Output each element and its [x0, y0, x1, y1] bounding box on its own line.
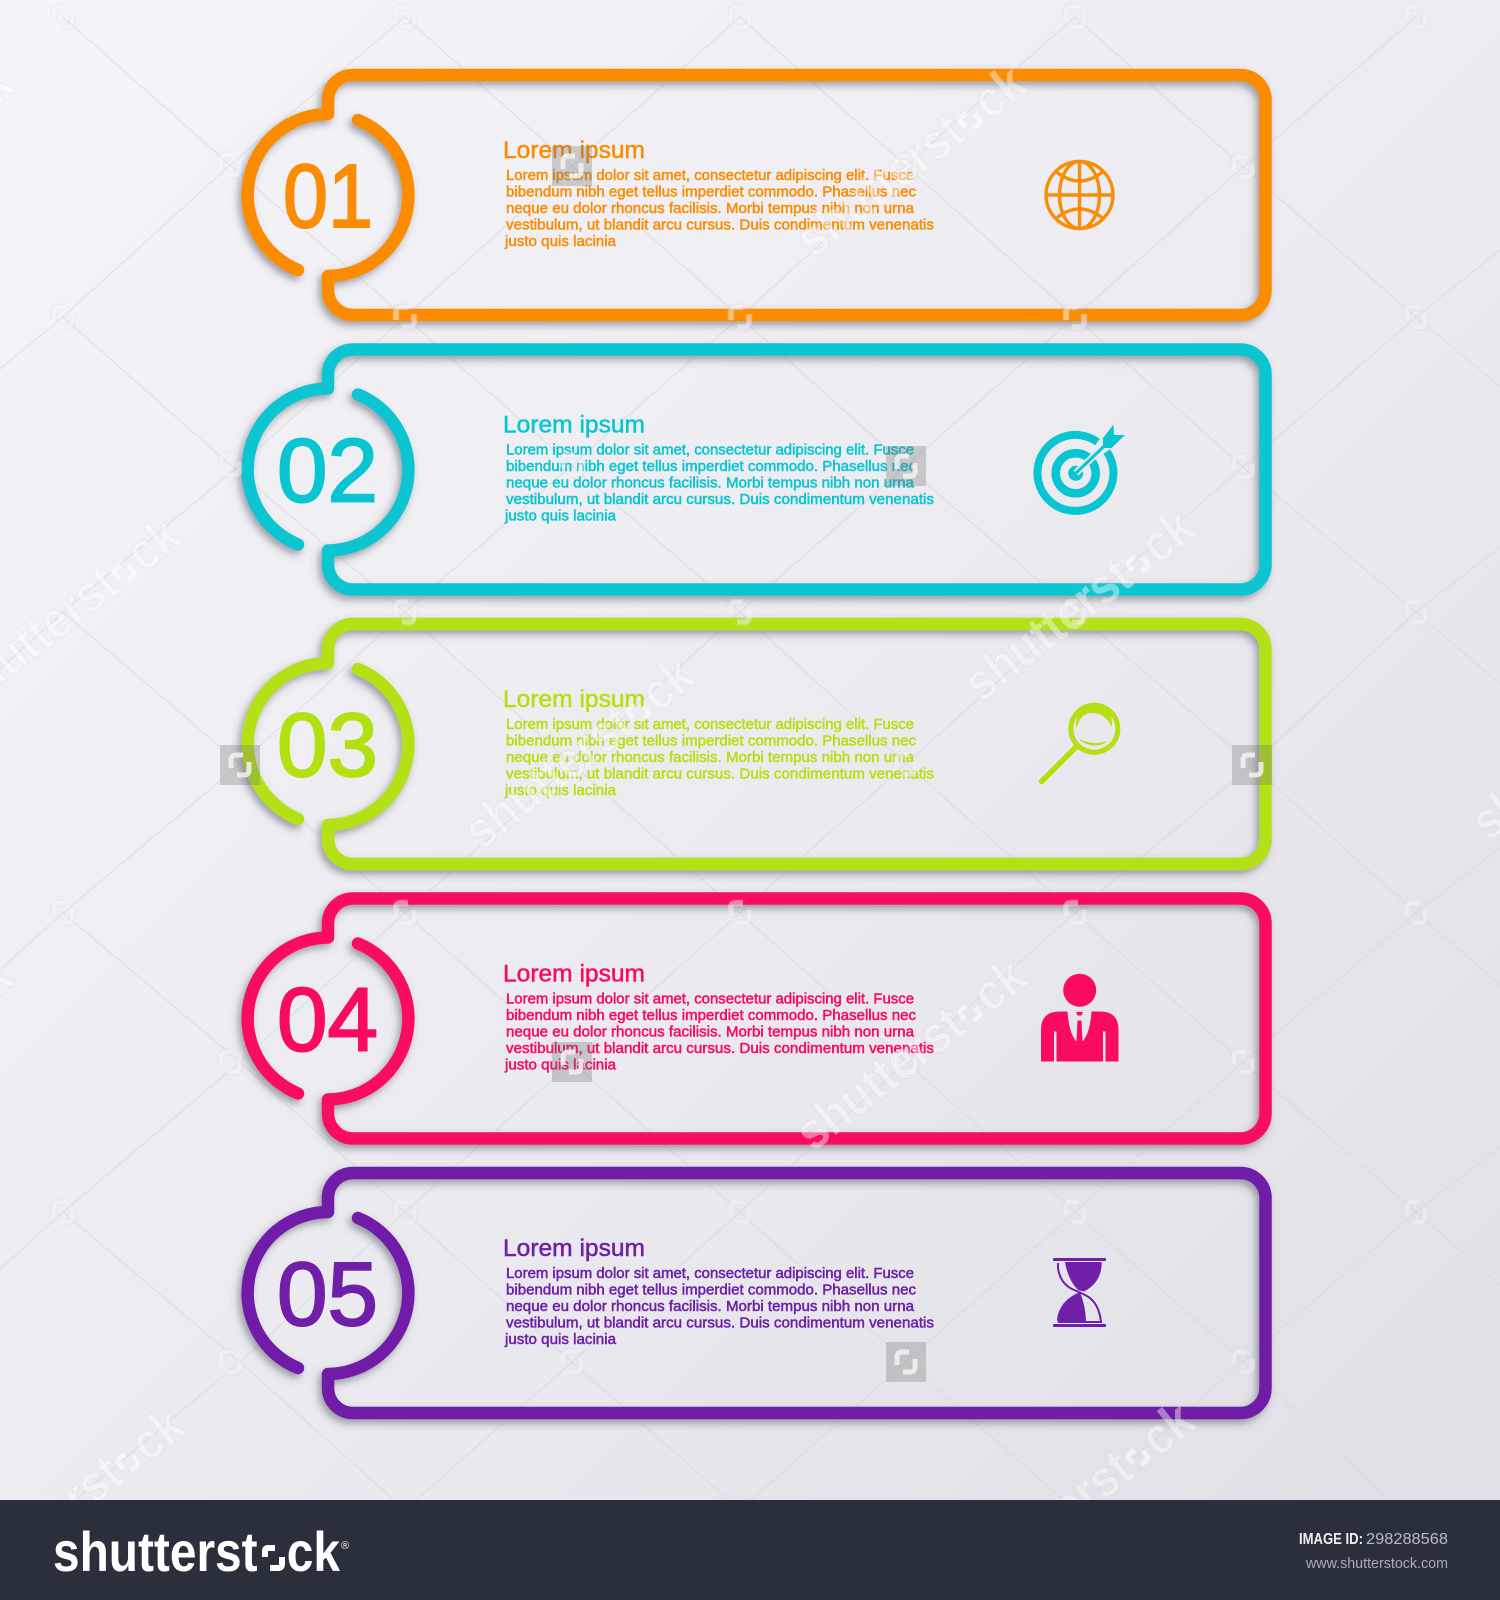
- text block 2: bibendum nibh eget tellus imperdiet commodo. Phasellus nec: [506, 459, 916, 475]
- watermark text: shutterstock: [953, 498, 1205, 713]
- text block 5: [504, 1266, 934, 1348]
- text block 1: Lorem ipsum dolor sit amet, consectetur adipiscing elit. Fusce: [506, 168, 914, 184]
- frame 4: [248, 898, 1266, 1138]
- text block 1: [504, 168, 934, 250]
- watermark brackets: [54, 7, 1425, 1372]
- text block 3: justo quis lacinia: [504, 783, 617, 799]
- footer logo: ®: [341, 1540, 349, 1552]
- image id: 298288568: [1366, 1531, 1448, 1548]
- text block 1: bibendum nibh eget tellus imperdiet commodo. Phasellus nec: [506, 184, 916, 200]
- icon: businessman: [1041, 974, 1118, 1062]
- text block 4: justo quis lacinia: [504, 1058, 617, 1074]
- icon: magnifying glass: [1042, 704, 1118, 782]
- watermark text: shutterstock: [453, 646, 705, 861]
- number 05: 05: [277, 1245, 378, 1345]
- text block 1: justo quis lacinia: [504, 234, 617, 250]
- text block 3: vestibulum, ut blandit arcu cursus. Duis condimentum venenatis: [506, 766, 934, 782]
- text block 2: vestibulum, ut blandit arcu cursus. Duis condimentum venenatis: [506, 492, 934, 508]
- frame 2: [248, 350, 1266, 590]
- text block 2: Lorem ipsum dolor sit amet, consectetur adipiscing elit. Fusce: [506, 442, 914, 458]
- watermark text: shutterstock: [953, 1391, 1205, 1600]
- number 03: 03: [277, 696, 378, 796]
- watermark text: shutterstock: [785, 947, 1037, 1162]
- text block 1: neque eu dolor rhoncus facilisis. Morbi tempus nibh non urna: [506, 201, 915, 217]
- text block 1: vestibulum, ut blandit arcu cursus. Duis condimentum venenatis: [506, 218, 934, 234]
- text block 3: bibendum nibh eget tellus imperdiet commodo. Phasellus nec: [506, 734, 916, 750]
- icon: hourglass: [1053, 1258, 1106, 1327]
- heading 2: Lorem ipsum: [503, 412, 645, 438]
- image id: IMAGE ID:: [1299, 1531, 1363, 1548]
- text block 4: [504, 992, 934, 1074]
- footer bar: [0, 1500, 1500, 1600]
- frame 5: [248, 1173, 1266, 1413]
- number 02: 02: [277, 422, 378, 522]
- icon: globe: [1046, 162, 1113, 228]
- text block 5: vestibulum, ut blandit arcu cursus. Duis condimentum venenatis: [506, 1316, 934, 1332]
- panel 1: orange: [248, 75, 1266, 315]
- number 04: 04: [277, 970, 378, 1070]
- frame 3: [248, 624, 1266, 864]
- watermark grey squares: [220, 146, 1272, 1382]
- text block 4: neque eu dolor rhoncus facilisis. Morbi tempus nibh non urna: [506, 1024, 915, 1040]
- heading 1: Lorem ipsum: [503, 137, 645, 164]
- frame 1: [248, 75, 1266, 315]
- text block 5: bibendum nibh eget tellus imperdiet commodo. Phasellus nec: [506, 1282, 916, 1298]
- heading 3: Lorem ipsum: [503, 686, 645, 713]
- text block 4: bibendum nibh eget tellus imperdiet commodo. Phasellus nec: [506, 1008, 916, 1024]
- text block 4: Lorem ipsum dolor sit amet, consectetur adipiscing elit. Fusce: [506, 992, 914, 1008]
- text block 3: [504, 717, 934, 799]
- panel 2: cyan: [248, 350, 1266, 590]
- text block 3: Lorem ipsum dolor sit amet, consectetur adipiscing elit. Fusce: [506, 717, 914, 733]
- text block 5: justo quis lacinia: [504, 1332, 617, 1348]
- text block 5: Lorem ipsum dolor sit amet, consectetur adipiscing elit. Fusce: [506, 1266, 914, 1282]
- heading 5: Lorem ipsum: [503, 1235, 645, 1262]
- icon: target with arrow: [1037, 424, 1125, 511]
- website url: www.shutterstock.com: [1305, 1555, 1448, 1572]
- panel 5: purple: [248, 1173, 1266, 1413]
- number 01: 01: [283, 147, 373, 247]
- text block 4: vestibulum, ut blandit arcu cursus. Duis condimentum venenatis: [506, 1041, 934, 1057]
- footer logo: shutterstock: [53, 1520, 341, 1583]
- text block 2: neque eu dolor rhoncus facilisis. Morbi tempus nibh non urna: [506, 476, 915, 492]
- heading 4: Lorem ipsum: [503, 960, 645, 988]
- panel 3: lime: [248, 624, 1266, 864]
- image id: [1299, 1531, 1448, 1548]
- text block 2: justo quis lacinia: [504, 508, 617, 524]
- text block 3: neque eu dolor rhoncus facilisis. Morbi tempus nibh non urna: [506, 750, 915, 766]
- text block 2: [504, 442, 934, 524]
- text block 5: neque eu dolor rhoncus facilisis. Morbi tempus nibh non urna: [506, 1299, 915, 1315]
- watermark text: shutterstock: [785, 54, 1037, 269]
- panel 4: pink: [248, 898, 1266, 1138]
